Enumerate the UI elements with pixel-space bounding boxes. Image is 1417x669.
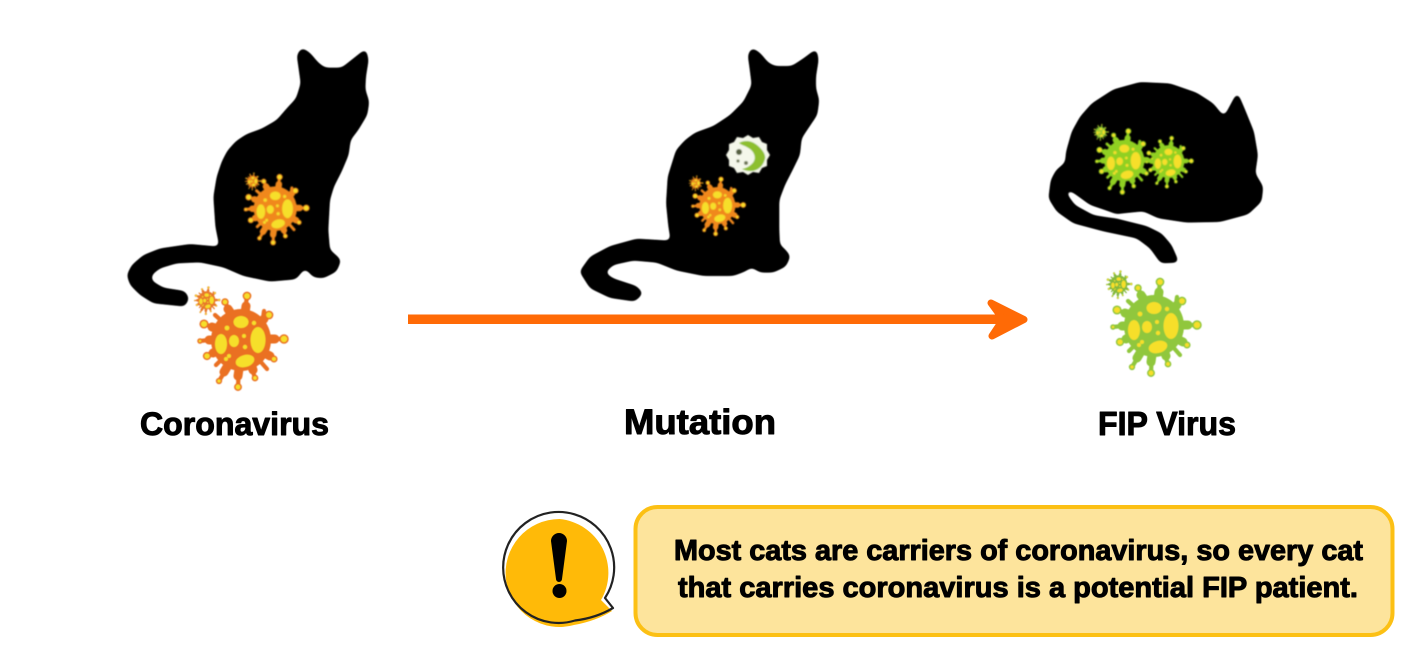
panel: coronavirus cat [127,47,369,390]
callout text line 2: that carries coronavirus is a potential FIP patient. [678,572,1358,604]
icon: mutating green cell [726,135,770,175]
panel: FIP cat [1048,82,1263,376]
icon: warning speech bubble [503,512,614,627]
icon: green viruses inside cat [1094,124,1193,194]
panel: mutation cat [579,47,819,302]
label: FIP Virus: FIP Virus [1098,405,1236,442]
label: Mutation: Mutation [624,403,776,442]
callout: carrier warning [636,507,1392,635]
icon: virus inside cat [244,173,309,245]
callout text line 1: Most cats are carriers of coronavirus, so every cat [674,535,1363,567]
label: Coronavirus: Coronavirus [140,406,329,442]
icon: sitting black cat silhouette with tail [579,47,819,302]
icon: orange virus inside cat [689,176,746,236]
icon: sitting black cat silhouette [127,47,369,307]
icon: green FIP virus [1106,270,1201,376]
icon: orange coronavirus [194,286,288,390]
icon: curled black cat silhouette [1048,82,1263,263]
arrow: mutation progression [408,303,1024,336]
